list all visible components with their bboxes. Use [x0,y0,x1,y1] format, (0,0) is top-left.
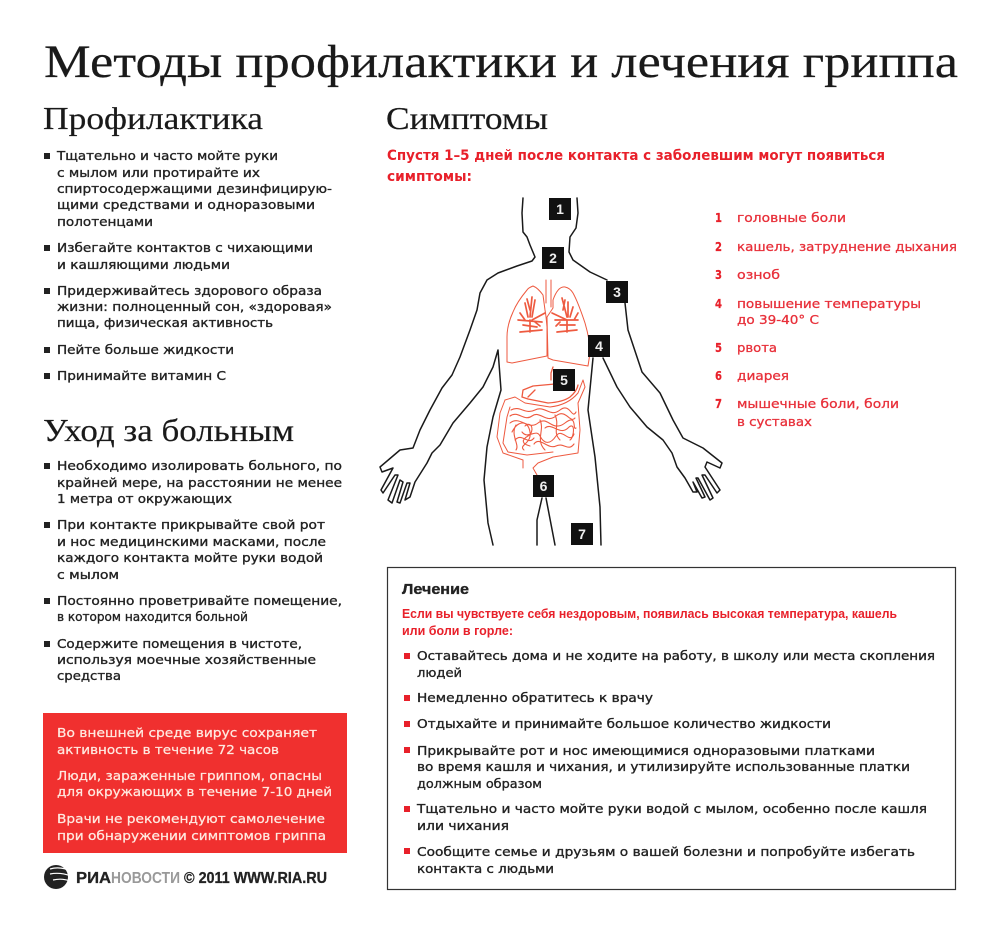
symptom marker 3: 3 [613,284,621,300]
heading: symptoms: Симптомы [386,100,548,136]
treatment list: контакта с людьми [417,861,554,876]
symptom marker 4 [588,335,610,357]
text block: prevention list [44,148,332,383]
symptom marker 6 [533,475,554,497]
treatment intro: или боли в горле: [402,623,513,638]
legend: symptoms list: 1 [715,210,722,225]
legend: symptoms list: 5 [715,340,722,355]
text block: patient care list: и нос медицинскими масками, после [57,534,326,549]
callout: red facts panel: активность в течение 72 часов [57,742,279,757]
symptom marker 3 [606,281,628,303]
treatment list: Оставайтесь дома и не ходите на работу, в школу или места скопления [417,648,935,663]
text block: patient care list: в котором находится больной [57,609,248,624]
treatment list: во время кашля и чихания, и утилизируйте использованные платки [417,759,910,774]
legend: symptoms list: 7 [715,396,722,411]
callout: red facts panel: при обнаружении симптомов гриппа [57,828,326,843]
treatment intro [402,606,897,638]
callout: red facts panel [43,713,347,853]
treatment list: людей [417,665,462,680]
text block: patient care list: Содержите помещения в чистоте, [57,636,302,651]
callout: red facts panel: Врачи не рекомендуют самолечение [57,811,325,826]
treatment list: или чихания [417,818,509,833]
treatment list: должным образом [417,776,542,791]
legend: symptoms list: 3 [715,267,722,282]
text block: patient care list: 1 метра от окружающих [57,491,232,506]
treatment list: Прикрывайте рот и нос имеющимися одноразовыми платками [417,743,875,758]
symptom marker 1: 1 [556,201,564,217]
treatment heading: Лечение [402,581,469,598]
text block: prevention list: Избегайте контактов с чихающими [57,240,313,255]
text block: symptoms intro [387,148,885,185]
legend: symptoms list [715,210,957,429]
text block: prevention list: Тщательно и часто мойте руки [56,148,278,163]
body diagram [380,198,722,545]
symptom marker 7 [571,523,593,545]
legend: symptoms list: повышение температуры [737,296,921,311]
text block: prevention list: щими средствами и одноразовыми [57,197,315,212]
text block: patient care list: используя моечные хозяйственные [57,652,316,667]
text block: patient care list: каждого контакта мойте руки водой [57,550,323,565]
symptom marker 2: 2 [549,250,557,266]
legend: symptoms list: 2 [715,239,722,254]
logo: RIA Novosti: © 2011 WWW.RIA.RU [184,870,327,887]
legend: symptoms list: головные боли [737,210,846,225]
legend: symptoms list: мышечные боли, боли [737,396,899,411]
text block: symptoms intro: Спустя 1–5 дней после контакта с заболевшим могут появиться [387,148,885,164]
digestive system [497,367,585,475]
treatment list: Отдыхайте и принимайте большое количество жидкости [417,716,831,731]
symptom marker 5 [553,369,575,391]
symptom marker 7: 7 [578,526,586,542]
symptom marker 6: 6 [540,478,548,494]
symptom marker 2 [542,247,564,269]
logo: RIA Novosti: РИА [76,870,111,887]
logo: RIA Novosti: НОВОСТИ [111,870,180,887]
legend: symptoms list: 4 [715,296,722,311]
text block: prevention list: и кашляющими людьми [57,257,230,272]
symptom marker 5: 5 [560,372,568,388]
treatment intro: Если вы чувствуете себя нездоровым, появилась высокая температура, кашель [402,606,897,621]
text block: prevention list: Пейте больше жидкости [57,342,234,357]
symptom marker 1 [549,198,571,220]
legend: symptoms list: озноб [737,267,780,282]
text block: prevention list: с мылом или протирайте их [57,165,260,180]
treatment list: Сообщите семье и друзьям о вашей болезни и попробуйте избегать [417,844,915,859]
text block: prevention list: спиртосодержащими дезинфицирую- [57,181,332,196]
text block: patient care list: Постоянно проветривайте помещение, [57,593,342,608]
text block: patient care list [44,458,342,683]
treatment list: Тщательно и часто мойте руки водой с мылом, особенно после кашля [416,801,927,816]
legend: symptoms list: рвота [737,340,777,355]
legend: symptoms list: кашель, затруднение дыхания [737,239,957,254]
panel: treatment [388,568,956,890]
lungs [507,280,590,366]
heading: prevention: Профилактика [43,100,263,136]
text block: patient care list: Необходимо изолировать больного, по [57,458,342,473]
legend: symptoms list: в суставах [737,414,812,429]
treatment list [404,648,935,876]
treatment list: Немедленно обратитесь к врачу [417,690,654,705]
text block: prevention list: пища, физическая активность [57,315,273,330]
text block: symptoms intro: симптомы: [387,169,472,185]
body outline [380,198,722,545]
legend: symptoms list: 6 [715,368,722,383]
text block: patient care list: с мылом [57,567,119,582]
text block: prevention list: жизни: полноценный сон, «здоровая» [57,299,332,314]
legend: symptoms list: диарея [737,368,789,383]
text block: patient care list: крайней мере, на расстоянии не менее [57,475,342,490]
symptom marker 4: 4 [595,338,603,354]
text block: prevention list: Принимайте витамин С [57,368,226,383]
callout: red facts panel: для окружающих в течение 7-10 дней [57,784,332,799]
heading: patient care: Уход за больным [43,412,294,448]
title: Методы профилактики и лечения гриппа [44,36,958,88]
callout: red facts panel: Люди, зараженные гриппом, опасны [57,768,322,783]
legend: symptoms list: до 39-40° С [737,312,819,327]
text block: patient care list: При контакте прикрывайте свой рот [57,517,325,532]
logo: RIA Novosti [44,865,327,889]
text block: prevention list: полотенцами [57,214,153,229]
callout: red facts panel: Во внешней среде вирус сохраняет [57,725,317,740]
text block: patient care list: средства [57,668,121,683]
text block: prevention list: Придерживайтесь здорового образа [57,283,322,298]
